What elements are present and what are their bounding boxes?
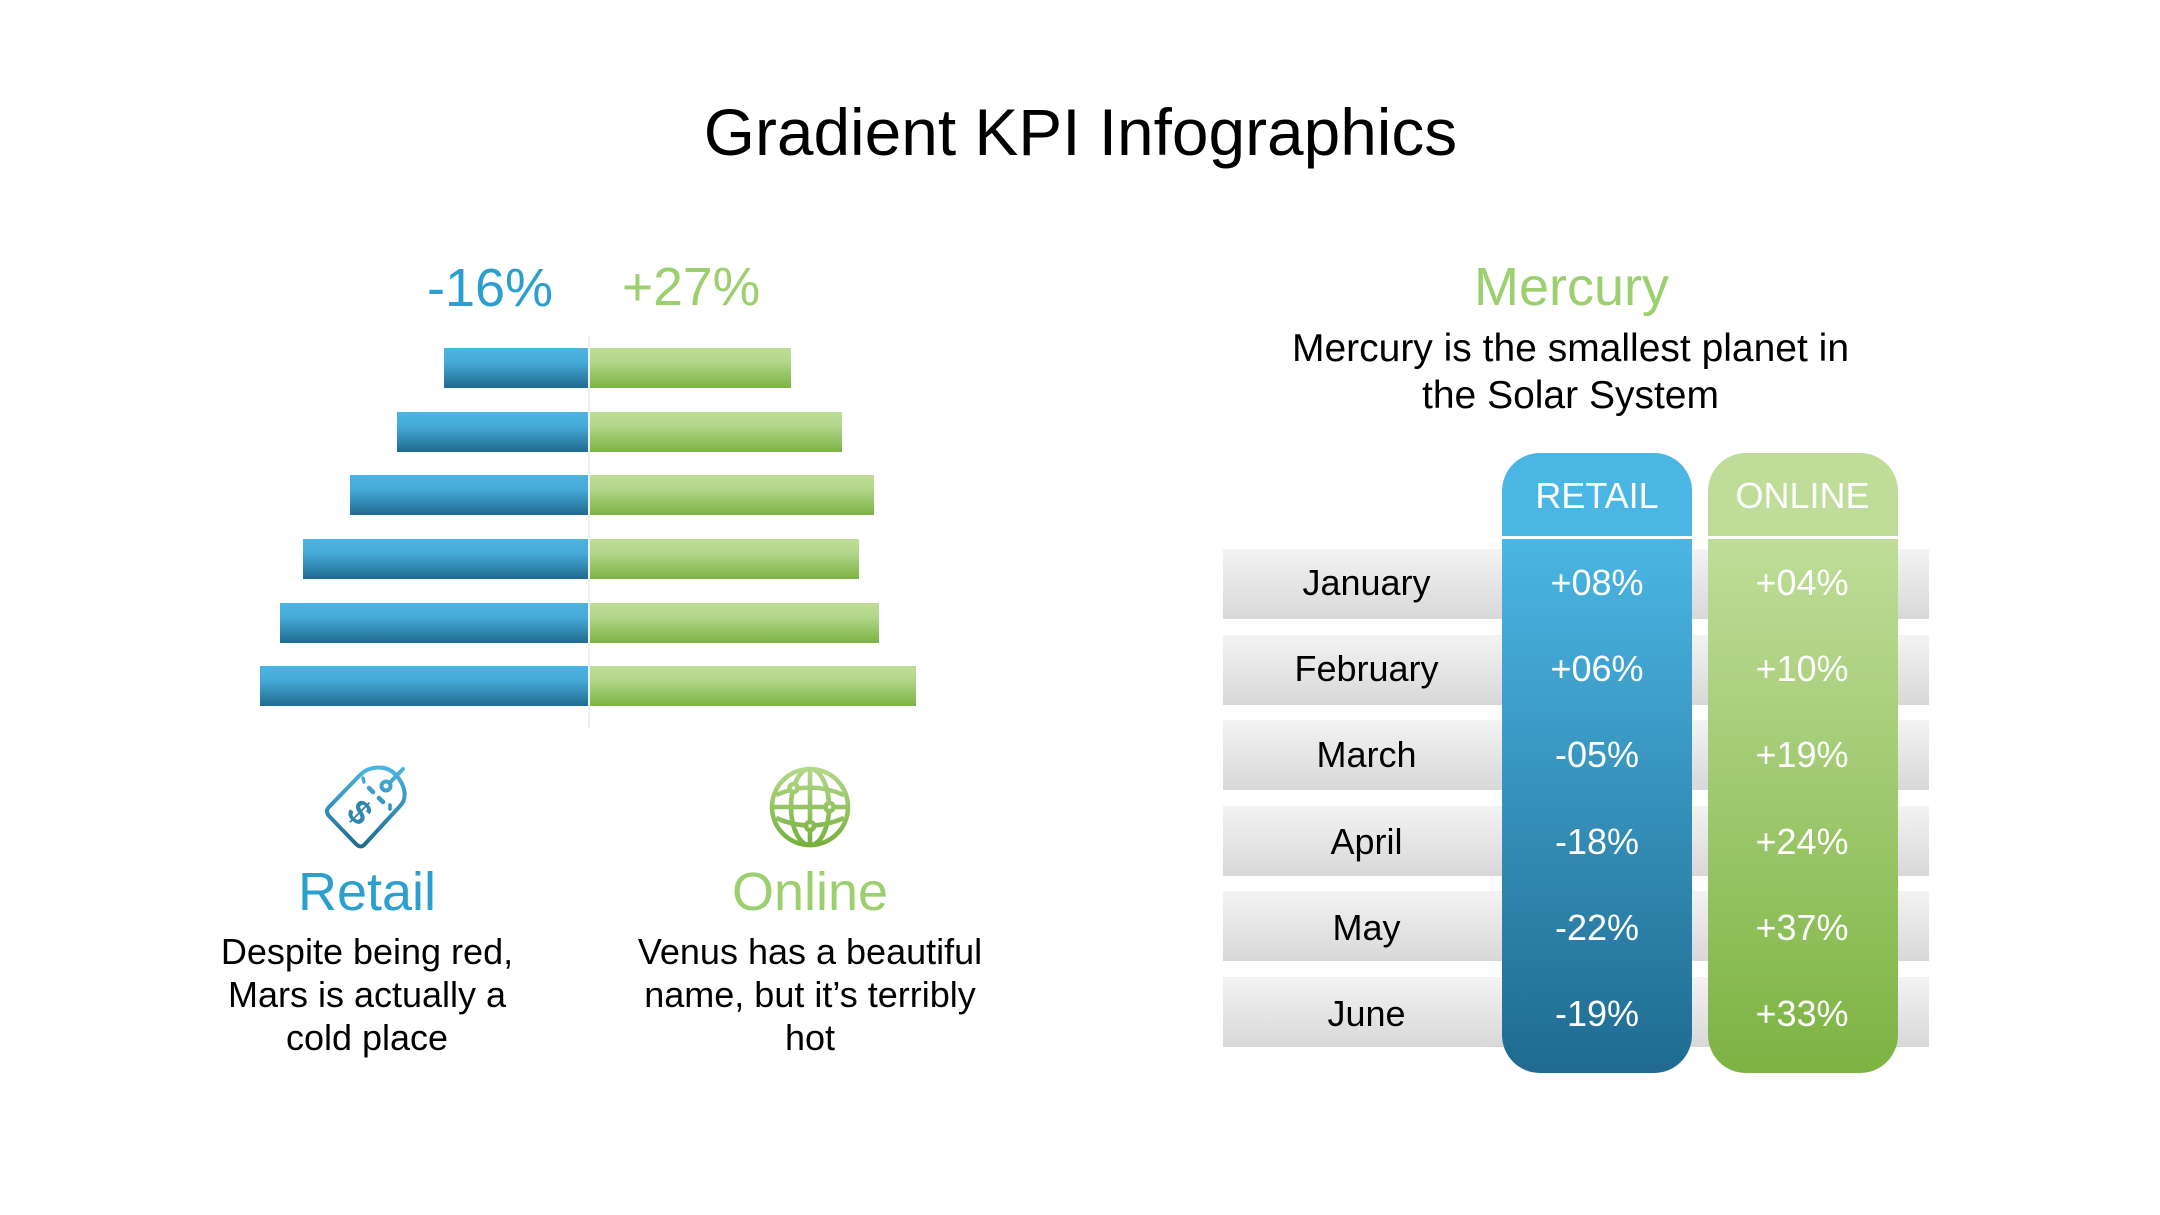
row 4 bars (303, 539, 859, 579)
column: retail: +06% (1550, 648, 1644, 689)
row 3 bars (350, 475, 874, 515)
icon: price tag: $ (339, 793, 379, 833)
column: online: +04% (1755, 562, 1849, 603)
column: online: +19% (1755, 734, 1849, 775)
table (1223, 453, 1929, 1073)
text: mercury description (1292, 326, 1849, 416)
column: online (1708, 453, 1898, 1073)
row 2 bars (397, 412, 842, 452)
column: online: +10% (1755, 648, 1849, 689)
kpi value: online: +27% (622, 258, 760, 317)
column: retail: -18% (1555, 820, 1639, 862)
heading: online: Online (732, 862, 888, 922)
column header: online: ONLINE (1735, 475, 1870, 516)
text: online description: hot (785, 1016, 835, 1058)
month labels: February (1294, 648, 1439, 689)
text: online description (638, 930, 982, 1058)
text: retail description: Mars is actually a (228, 974, 506, 1014)
text: retail description (221, 930, 513, 1058)
column header: retail (1502, 453, 1692, 539)
column: online: +33% (1755, 993, 1849, 1034)
month labels: March (1316, 734, 1417, 775)
title: Gradient KPI Infographics (704, 95, 1457, 169)
text: retail description: cold place (286, 1016, 448, 1058)
column: retail: -19% (1555, 993, 1639, 1034)
heading: mercury: Mercury (1474, 257, 1669, 317)
month labels: June (1327, 993, 1406, 1034)
text: online description: name, but it’s terribly (644, 974, 976, 1014)
month labels: April (1330, 820, 1403, 862)
text: mercury description: the Solar System (1422, 374, 1719, 416)
column: retail: -05% (1555, 734, 1639, 775)
column: retail: +08% (1550, 562, 1644, 603)
icon: price tag (324, 766, 407, 848)
heading: retail: Retail (298, 862, 436, 922)
row backgrounds (1223, 549, 1929, 1047)
column: online: +37% (1755, 907, 1849, 948)
row 6 bars (260, 666, 916, 706)
text: mercury description: Mercury is the smallest planet in (1292, 326, 1849, 370)
icon: globe (770, 766, 850, 848)
text: online description: Venus has a beautiful (638, 930, 982, 972)
column: retail (1502, 453, 1692, 1073)
column: online: +24% (1755, 820, 1849, 862)
column: retail: -22% (1555, 907, 1639, 948)
month labels: May (1332, 907, 1400, 948)
row 1 bars (444, 348, 791, 388)
month labels (1294, 562, 1439, 1034)
row 5 bars (280, 603, 879, 643)
center axis (588, 336, 590, 728)
kpi value: retail: -16% (427, 258, 553, 318)
text: retail description: Despite being red, (221, 930, 513, 972)
month labels: January (1302, 562, 1431, 603)
diverging bar chart (260, 336, 916, 728)
column header: retail: RETAIL (1535, 475, 1659, 516)
column header: online (1707, 453, 1898, 539)
